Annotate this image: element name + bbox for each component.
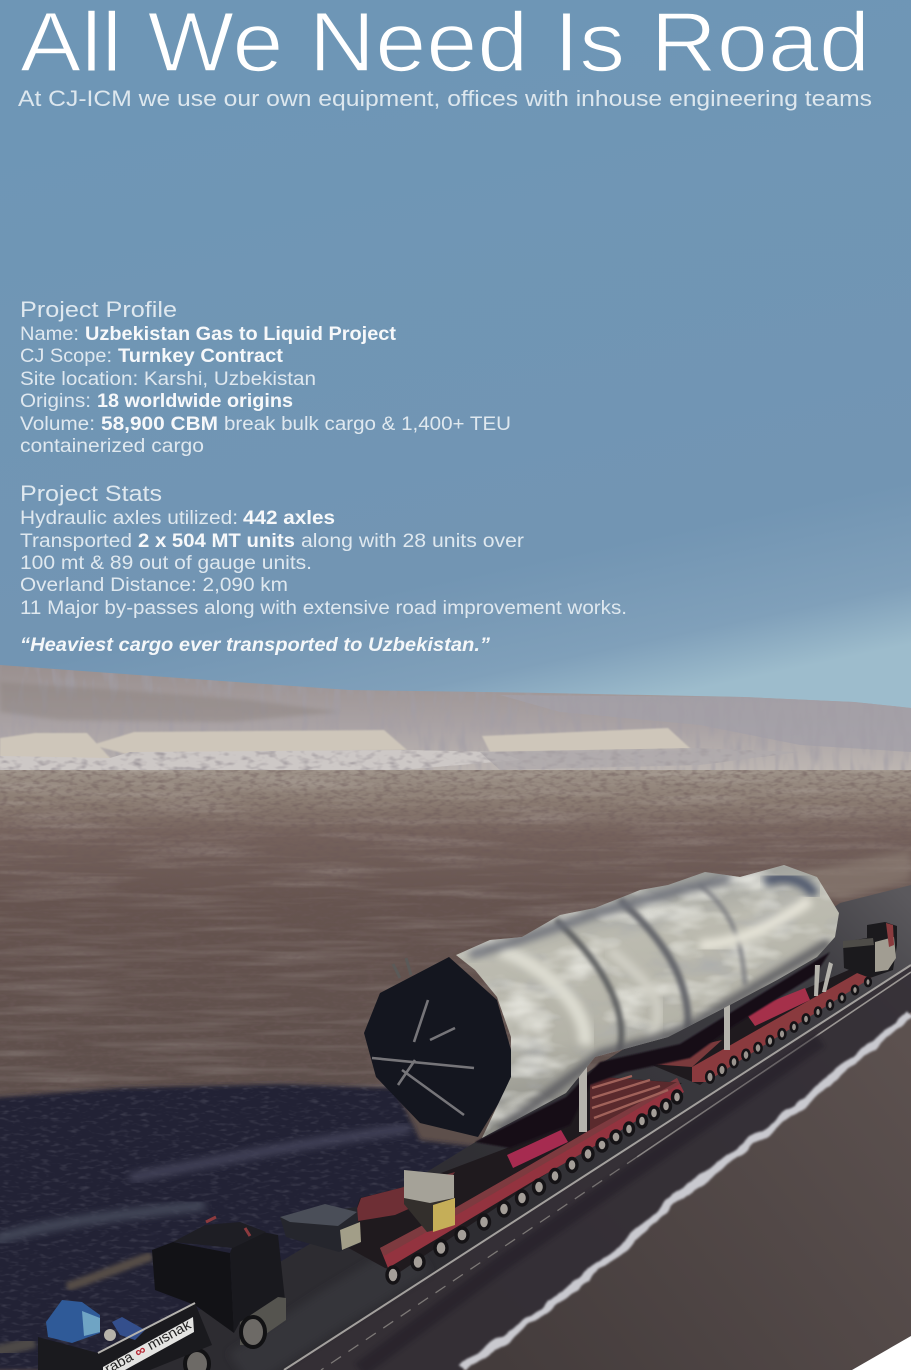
- grey equipment box: [280, 1207, 360, 1252]
- silver tarp: [456, 865, 839, 1138]
- wheels: rear trailer: [387, 1091, 682, 1283]
- row: scope: [20, 346, 284, 367]
- truck bed rail: [98, 1303, 195, 1353]
- tarp folds: [470, 878, 830, 1130]
- row: scope: Turnkey Contract: [118, 346, 284, 367]
- pale cliffs: [0, 728, 692, 760]
- row: transported: [20, 531, 525, 574]
- row: axles: Hydraulic axles utilized:: [20, 508, 238, 529]
- row: distance: Overland Distance: 2,090 km: [20, 575, 288, 596]
- pulling tractor far end: [843, 922, 897, 978]
- wrapped cargo vessel: [364, 865, 839, 1138]
- snow strip along road: [462, 1014, 911, 1368]
- text block: project stats: [20, 481, 627, 619]
- subtitle: At CJ-ICM we use our own equipment, offices with inhouse engineering teams: [18, 86, 872, 111]
- row: axles: 442 axles: [243, 508, 335, 529]
- eroded scree band: [0, 750, 520, 775]
- truck bed: [38, 1303, 212, 1370]
- row: transported: 100 mt & 89 out of gauge units.: [20, 553, 312, 574]
- row: name: Uzbekistan Gas to Liquid Project: [85, 324, 397, 345]
- vessel dark end: [364, 957, 511, 1137]
- row: scope: CJ Scope:: [20, 346, 112, 367]
- row: volume: Volume:: [20, 414, 95, 435]
- row: transported: along with 28 units over: [301, 531, 525, 552]
- heading: project profile: Project Profile: [20, 297, 177, 322]
- end plate braces: [372, 1000, 474, 1115]
- ground plain: [0, 770, 911, 1370]
- cargo supports: [579, 962, 833, 1132]
- row: site location: Site location: Karshi, Uzbekistan: [20, 369, 316, 390]
- cab roof: [173, 1222, 266, 1248]
- white corner: [852, 1336, 911, 1370]
- magenta machinery: [507, 1130, 568, 1168]
- blue tanks: [46, 1300, 100, 1343]
- row: volume: 58,900 CBM: [101, 414, 218, 435]
- row: volume: break bulk cargo & 1,400+ TEU: [224, 414, 511, 435]
- sky background: [0, 0, 911, 730]
- lifting lugs: [393, 958, 411, 978]
- heading: project stats: Project Stats: [20, 481, 162, 506]
- row: origins: Origins:: [20, 391, 91, 412]
- chassis: [240, 1297, 286, 1345]
- cab rear panel: [152, 1242, 234, 1333]
- row: name: Name:: [20, 324, 79, 345]
- road shoulder: [462, 1014, 911, 1370]
- distant mesa landscape: [0, 665, 911, 775]
- row: origins: 18 worldwide origins: [97, 391, 293, 412]
- row: volume: [20, 414, 511, 457]
- load boxes on trailer: [280, 1170, 455, 1252]
- long shadow of the convoy: [0, 1084, 510, 1370]
- quote: “Heaviest cargo ever transported to Uzbekistan.”: [20, 635, 491, 656]
- row: volume: containerized cargo: [20, 436, 204, 457]
- road: [100, 885, 911, 1370]
- text block: project profile: [20, 297, 511, 457]
- row: origins: [20, 391, 293, 412]
- row: transported: Transported: [20, 531, 132, 552]
- yellow crate: [404, 1170, 455, 1232]
- lead truck: [38, 1217, 286, 1370]
- cab side: [230, 1232, 285, 1333]
- front hydraulic trailer: [640, 965, 875, 1085]
- truck wheels: [241, 1317, 265, 1347]
- under-cargo shadow: [475, 952, 830, 1148]
- row: by-passes: 11 Major by-passes along with extensive road improvement works.: [20, 598, 627, 619]
- row: axles: [20, 508, 335, 529]
- row: transported: 2 x 504 MT units: [138, 531, 295, 552]
- wheels: front trailer: [706, 978, 871, 1083]
- rear hydraulic trailer: [345, 1076, 684, 1283]
